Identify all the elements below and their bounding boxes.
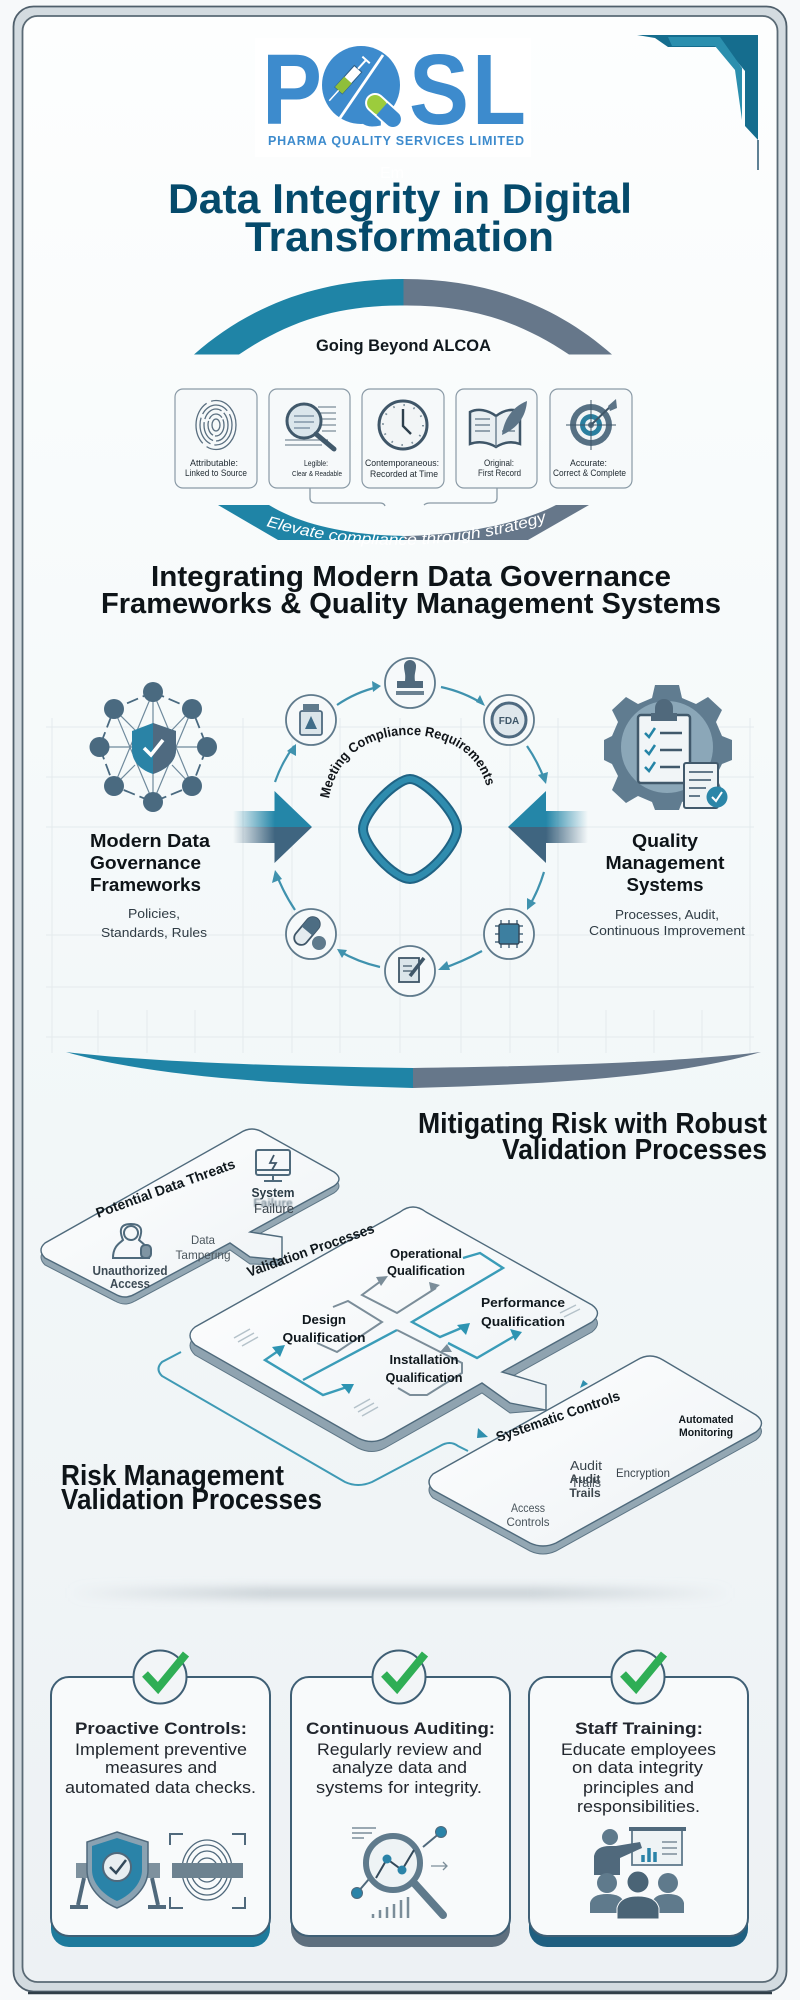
proactive text: Implement preventive: [75, 1741, 247, 1759]
training text: Educate employees: [561, 1741, 716, 1759]
card: accurate: Correct & Complete: [553, 468, 626, 479]
logo: [255, 34, 531, 157]
training text: principles and: [583, 1779, 694, 1797]
auditing text: [306, 1719, 495, 1797]
panel: systematic controls: Trails: [571, 1475, 601, 1490]
ring icon: pills: [286, 909, 336, 959]
ring icon: FDA seal: [484, 695, 534, 745]
heading: mitigating risk: Mitigating Risk with Robust: [418, 1108, 767, 1140]
card: attributable: Attributable:: [190, 458, 238, 469]
title: [168, 175, 632, 260]
heading: risk management: Validation Processes: [61, 1484, 322, 1516]
text: modern data governance: Governance: [90, 852, 201, 873]
text: modern data governance: Frameworks: [90, 874, 201, 895]
proactive text: Proactive Controls:: [75, 1719, 247, 1738]
proactive text: automated data checks.: [65, 1779, 256, 1797]
card: original: [456, 389, 537, 488]
installation label: Installation: [390, 1353, 458, 1367]
arc: going beyond ALCOA: [194, 279, 612, 355]
system failure label: System: [252, 1185, 294, 1200]
card: accurate: Accurate:: [570, 458, 607, 469]
panel: validation processes: Qualification: [481, 1315, 565, 1329]
icon: compliance ring: [272, 658, 548, 996]
panel: potential data threats: Failure: [253, 1196, 293, 1210]
panel: systematic controls: Trails: [569, 1486, 601, 1500]
ring icon: chip: [484, 909, 534, 959]
curved label: meeting compliance: Meeting Compliance Requirements: [320, 726, 493, 798]
text: quality management systems: Systems: [626, 874, 704, 895]
corner decoration: [637, 35, 759, 170]
audit trails label: Audit: [570, 1458, 602, 1473]
panel: potential data threats: [41, 1129, 339, 1304]
text: quality management systems: Quality: [632, 830, 699, 851]
training text: [561, 1719, 716, 1816]
auditing text: analyze data and: [332, 1759, 467, 1777]
panel: proactive controls: [51, 1650, 270, 1947]
text: modern data governance: Standards, Rules: [101, 925, 208, 940]
stray label: Em: [380, 165, 404, 182]
auditing text: systems for integrity.: [316, 1779, 482, 1797]
panel: potential data threats: Failure: [254, 1201, 294, 1216]
access controls label: Access: [511, 1501, 545, 1515]
logo: Q: [331, 48, 389, 128]
logo: S: [409, 34, 469, 146]
icon: presenter and audience: [590, 1827, 686, 1919]
title: Transformation: [245, 213, 554, 260]
panel: systematic controls: Audit: [570, 1472, 600, 1486]
ring icon: FDA seal: FDA: [499, 716, 519, 727]
teal process flow: [265, 1253, 518, 1395]
panel: staff training: [529, 1650, 748, 1947]
panel: validation processes: Qualification: [387, 1264, 465, 1278]
card: accurate: [550, 389, 632, 488]
training text: responsibilities.: [577, 1798, 700, 1816]
ALCOA cards: [175, 389, 632, 488]
logo: L: [472, 34, 526, 146]
controls label: Systematic Controls: [494, 1387, 622, 1445]
icon: magnifier analysis: [352, 1826, 447, 1918]
ring icon: bottle: [286, 695, 336, 745]
card: legible: [269, 389, 350, 488]
card: contemporaneous: Contemporaneous:: [365, 458, 439, 469]
title: Data Integrity in Digital: [168, 175, 632, 222]
heading: integrating governance: Integrating Modern Data Governance: [151, 561, 671, 593]
auditing text: Continuous Auditing:: [306, 1719, 495, 1738]
icon: QMS gear: [604, 685, 732, 810]
design label: Design: [302, 1313, 346, 1327]
ring icon: document sign: [385, 946, 435, 996]
panel: systematic controls: Controls: [506, 1515, 550, 1529]
icon: fingerprint scan: [170, 1834, 245, 1908]
text: quality management systems: Continuous Improvement: [589, 923, 745, 938]
proactive text: [65, 1719, 256, 1797]
card: attributable: [175, 389, 257, 488]
arc banner: elevate compliance: Elevate compliance through strategy: [266, 513, 546, 540]
automated monitoring label: Automated: [678, 1414, 734, 1426]
heading: integrating governance: [101, 561, 721, 620]
text: modern data governance: Policies,: [128, 906, 180, 921]
card: original: First Record: [478, 468, 521, 479]
card: legible: Legible:: [304, 459, 328, 468]
panel: validation processes: Qualification: [386, 1371, 462, 1385]
auditing text: Regularly review and: [317, 1741, 482, 1759]
icon: monitor: [256, 1150, 290, 1181]
card: original: Original:: [484, 458, 514, 469]
text: quality management systems: [589, 830, 745, 938]
card: legible: Clear & Readable: [292, 469, 342, 478]
shadow divider: [70, 1588, 730, 1598]
heading: risk management: Risk Management: [61, 1460, 284, 1492]
bracket connecting cards: [310, 488, 497, 506]
operational label: Operational: [390, 1247, 462, 1261]
panel: validation processes: Qualification: [282, 1331, 366, 1345]
card: contemporaneous: Recorded at Time: [370, 469, 438, 480]
ring icon: stamp: [385, 658, 435, 708]
heading: mitigating risk: [418, 1108, 767, 1166]
data tampering label: Data: [191, 1233, 215, 1247]
panel: potential data threats: Access: [110, 1276, 150, 1291]
icon: shield barrier: [70, 1832, 166, 1908]
arc: going beyond ALCOA: Going Beyond ALCOA: [316, 336, 491, 355]
proactive text: measures and: [105, 1759, 217, 1777]
card: attributable: Linked to Source: [185, 468, 247, 479]
panel: validation processes: [190, 1207, 598, 1452]
heading: integrating governance: Frameworks & Quality Management Systems: [101, 588, 721, 620]
performance label: Performance: [481, 1296, 565, 1310]
arrow: governance into compliance: [233, 791, 312, 863]
check badge: [134, 1650, 186, 1704]
encryption label: Encryption: [616, 1466, 670, 1480]
icon: governance network: [90, 682, 217, 812]
hatch marks: [234, 1305, 580, 1416]
threat label: Potential Data Threats: [94, 1155, 237, 1221]
gray process flow: [317, 1278, 462, 1395]
unauthorized label: Unauthorized: [92, 1263, 168, 1278]
validation label: Validation Processes: [245, 1220, 376, 1280]
heading: risk management: [61, 1460, 322, 1516]
arrow: quality into compliance: [508, 791, 588, 863]
logo: P: [262, 34, 322, 146]
ring arrows: [275, 687, 545, 969]
logo: PHARMA QUALITY SERVICES LIMITED: [268, 134, 524, 148]
check badge: [372, 1650, 426, 1704]
panel: systematic controls: [429, 1356, 762, 1554]
training text: Staff Training:: [575, 1719, 703, 1738]
text: modern data governance: Modern Data: [90, 830, 211, 851]
center rounded diamond: [363, 779, 457, 879]
check badge: [612, 1650, 664, 1704]
arc banner: elevate compliance: [218, 505, 589, 540]
icon: hacker: [113, 1224, 151, 1258]
training text: on data integrity: [572, 1759, 704, 1777]
text: modern data governance: [90, 830, 211, 940]
heading: mitigating risk: Validation Processes: [502, 1134, 767, 1166]
swoosh divider: [66, 1052, 761, 1088]
card: contemporaneous: [362, 389, 444, 488]
panel: continuous auditing: [291, 1650, 510, 1947]
panel: systematic controls: Monitoring: [679, 1427, 733, 1439]
text: quality management systems: Processes, Audit,: [615, 907, 719, 922]
text: quality management systems: Management: [606, 852, 724, 873]
teal feedback loop: [158, 1352, 588, 1485]
panel: potential data threats: Tampering: [176, 1248, 230, 1262]
